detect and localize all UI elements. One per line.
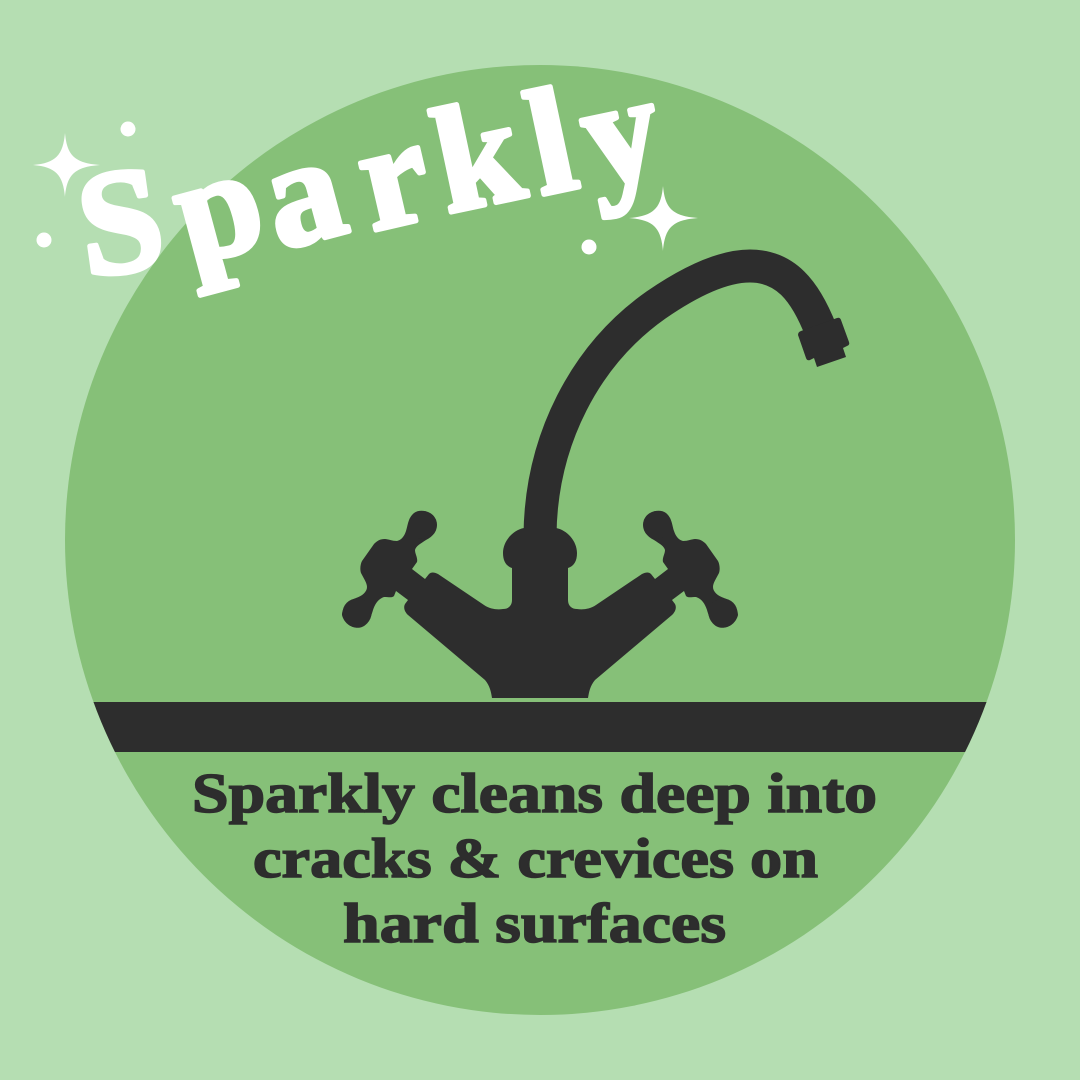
counter bar [60,702,1020,752]
title letter y: y [566,42,674,220]
caption line 1: Sparkly cleans deep into [192,763,877,825]
handle knobs [342,511,738,628]
title letter r: r [342,86,444,263]
tap base and handles [342,511,738,698]
icon: mixer tap [342,266,849,698]
sparkle left [33,133,100,197]
tap spout [540,266,821,535]
dot left [36,232,52,248]
dot right [582,240,596,254]
infographic canvas [34,65,1015,1015]
title: Sparkly [67,42,674,310]
title letter k: k [419,65,536,245]
sparkles [33,122,698,254]
caption [192,763,877,955]
caption line 3: hard surfaces [343,893,726,955]
title letter S: S [67,134,173,310]
title letter p: p [156,115,279,297]
title letter a: a [245,102,360,282]
green circle panel [65,65,1015,1015]
caption line 2: cracks & crevices on [253,828,818,890]
title letter l: l [513,56,589,227]
tap nozzle [798,318,849,367]
dot top left [120,122,136,136]
sparkle right [629,186,698,251]
